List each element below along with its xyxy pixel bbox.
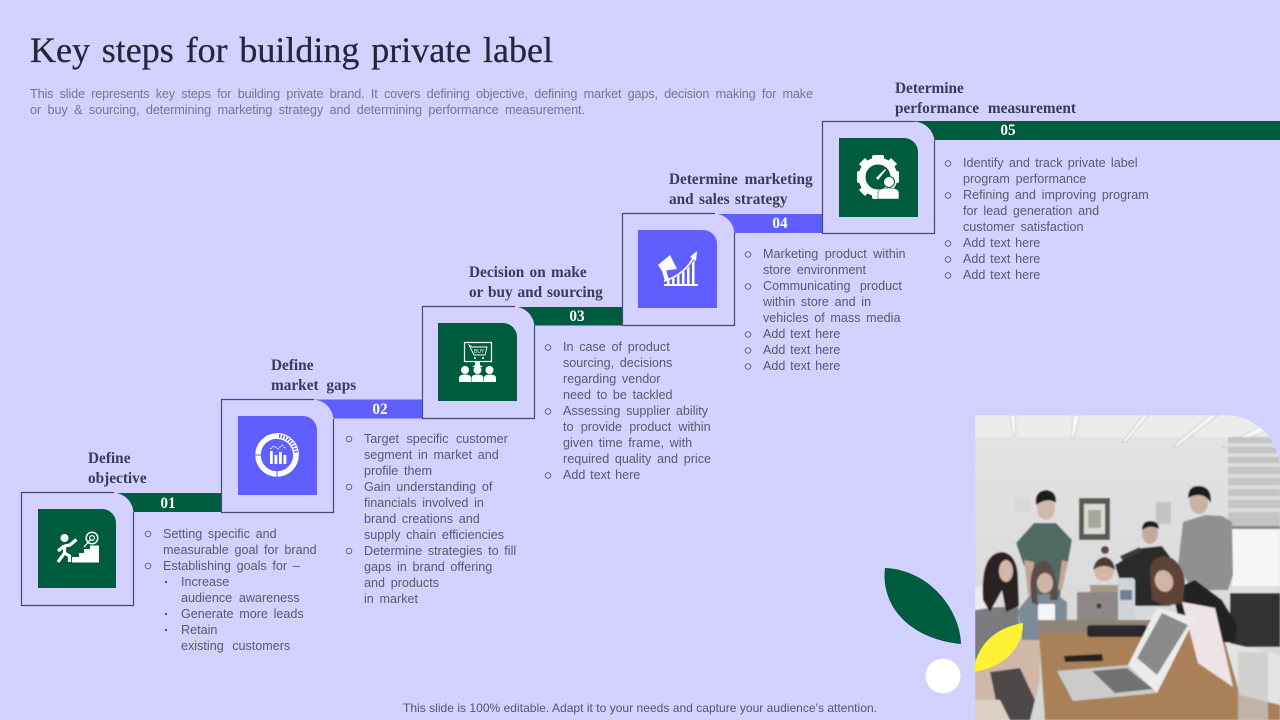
- step 1 bullets: existing customers: [181, 639, 290, 653]
- woman leaning with black jacket: [1172, 580, 1237, 645]
- intro text: This slide represents key steps for building private brand. It covers defining objective, defining market gaps, decision making for make: [30, 87, 813, 101]
- step 3 bullets: required quality and price: [563, 452, 711, 466]
- step 2 bullets: gaps in brand offering: [364, 560, 492, 574]
- items on right: [1225, 642, 1280, 705]
- step 5 bullets: for lead generation and: [963, 204, 1099, 218]
- step 2 bullets: [346, 432, 516, 606]
- step 1 bar: 01: [160, 495, 176, 512]
- step 5 bullets: customer satisfaction: [963, 220, 1084, 234]
- step 4 bar: [700, 214, 830, 233]
- step 3 bullets: regarding vendor: [563, 372, 660, 386]
- woman in black with cup: [1115, 546, 1177, 606]
- step 2 card: [222, 399, 334, 512]
- seated woman left: [975, 639, 1041, 700]
- step 5 bullets: program performance: [963, 172, 1086, 186]
- heading: define objective: Define: [88, 450, 131, 467]
- heading: decision on make or buy: Decision on make: [469, 264, 587, 281]
- step 2 bullets: segment in market and: [364, 448, 499, 462]
- step 2 bullets: in market: [364, 592, 418, 606]
- step 5 card: [822, 121, 935, 234]
- step 3 bullets: In case of product: [563, 340, 670, 354]
- frame on wall: [1079, 498, 1110, 540]
- step 4 bullets: Add text here: [763, 359, 840, 373]
- step 2 bullets: brand creations and: [364, 512, 480, 526]
- standing man in gray: [1178, 515, 1233, 590]
- step 2 bullets: and products: [364, 576, 439, 590]
- step 1 bullets: Setting specific and: [163, 527, 277, 541]
- heading: performance measurement: performance measurement: [895, 100, 1077, 117]
- heading: define objective: [88, 450, 147, 487]
- step 5 bullets: [945, 156, 1149, 282]
- step 2 bullets: profile them: [364, 464, 432, 478]
- step 3 bar: 03: [569, 308, 585, 325]
- step 1 bullets: Generate more leads: [181, 607, 304, 621]
- step 2 bullets: Gain understanding of: [364, 480, 493, 494]
- step 2 bar: 02: [372, 401, 388, 418]
- step 4 bullets: Add text here: [763, 327, 840, 341]
- leaf: yellow: [974, 623, 1023, 672]
- step 4 bullets: [745, 247, 906, 373]
- heading: marketing and sales strategy: and sales strategy: [669, 191, 788, 208]
- heading: define objective: objective: [88, 470, 147, 487]
- step 5 bar: [900, 121, 1280, 140]
- heading: decision on make or buy: [469, 264, 603, 301]
- icon: audience with buy screen: BUY: [474, 349, 485, 355]
- step 5 bullets: Add text here: [963, 268, 1040, 282]
- step 1 bar: [100, 493, 230, 512]
- heading: decision on make or buy: or buy and sourcing: [469, 284, 603, 301]
- step 3 bullets: given time frame, with: [563, 436, 692, 450]
- step 4 bullets: vehicles of mass media: [763, 311, 900, 325]
- front laptop: [1128, 608, 1195, 693]
- back laptop and bottle: [1077, 592, 1119, 622]
- step 3 bullets: sourcing, decisions: [563, 356, 672, 370]
- heading: marketing and sales strategy: [669, 171, 813, 208]
- footer note: This slide is 100% editable. Adapt it to your needs and capture your audience's attention.: [403, 701, 877, 715]
- seated girl center: [1089, 584, 1119, 593]
- icon: donut with bar chart: [254, 436, 296, 478]
- right laptop: [1182, 602, 1233, 687]
- icon: megaphone with rising chart: [658, 251, 698, 286]
- standing man in green: [1016, 523, 1072, 600]
- step 5 bullets: Refining and improving program: [963, 188, 1149, 202]
- step 3 bullets: to provide product within: [563, 420, 711, 434]
- step 3 bullets: Assessing supplier ability: [563, 404, 709, 418]
- step 3 bullets: Add text here: [563, 468, 640, 482]
- step 1 bullets: Increase: [181, 575, 229, 589]
- intro text: or buy & sourcing, determining marketing strategy and determining performance measurement.: [30, 103, 585, 117]
- step 5 bullets: Identify and track private label: [963, 156, 1138, 170]
- step 1 card: [22, 492, 134, 606]
- step 4 card: [622, 213, 734, 326]
- step 1 bullets: Establishing goals for –: [163, 559, 300, 573]
- heading: performance measurement: Determine: [895, 80, 964, 97]
- step 4 bullets: Marketing product within: [763, 247, 906, 261]
- heading: performance measurement: [895, 80, 1077, 117]
- step 4 bullets: Add text here: [763, 343, 840, 357]
- step 4 bullets: store environment: [763, 263, 867, 277]
- step 1 bullets: Retain: [181, 623, 217, 637]
- step 3 bullets: need to be tackled: [563, 388, 673, 402]
- step 2 bullets: supply chain efficiencies: [364, 528, 504, 542]
- step 2 bullets: Target specific customer: [364, 432, 508, 446]
- step 2 bar: [300, 400, 430, 418]
- icon: person climbing stairs to target: [58, 532, 99, 562]
- heading: define market gaps: [271, 357, 356, 394]
- step 1 bullets: measurable goal for brand: [163, 543, 317, 557]
- heading: define market gaps: Define: [271, 357, 314, 374]
- heading: define market gaps: market gaps: [271, 377, 356, 394]
- step 5 bullets: Add text here: [963, 236, 1040, 250]
- intro text: [30, 87, 813, 117]
- step 5 bullets: Add text here: [963, 252, 1040, 266]
- seated woman with glasses: [1017, 594, 1068, 641]
- icon: gear with gauge and person: [857, 155, 899, 199]
- chair and legs lower left: [990, 668, 1035, 720]
- step 1 bullets: [145, 527, 317, 653]
- step 2 bullets: financials involved in: [364, 496, 484, 510]
- step 4 bullets: within store and in: [762, 295, 871, 309]
- step 1 bullets: audience awareness: [181, 591, 300, 605]
- decorative white circle: [926, 658, 960, 694]
- step 2 bullets: Determine strategies to fill: [364, 544, 516, 558]
- leaf: green: [885, 568, 961, 644]
- step 3 bar: [500, 307, 630, 326]
- step 5 bar: 05: [1000, 122, 1016, 139]
- table: [1038, 620, 1280, 720]
- photo: team around laptops: [975, 415, 1280, 720]
- title: Key steps for building private label: [30, 30, 553, 70]
- heading: marketing and sales strategy: Determine marketing: [669, 171, 813, 188]
- step 4 bullets: Communicating product: [763, 279, 902, 293]
- step 4 bar: 04: [772, 215, 788, 232]
- step 3 bullets: [545, 340, 711, 482]
- step 3 card: [422, 306, 535, 418]
